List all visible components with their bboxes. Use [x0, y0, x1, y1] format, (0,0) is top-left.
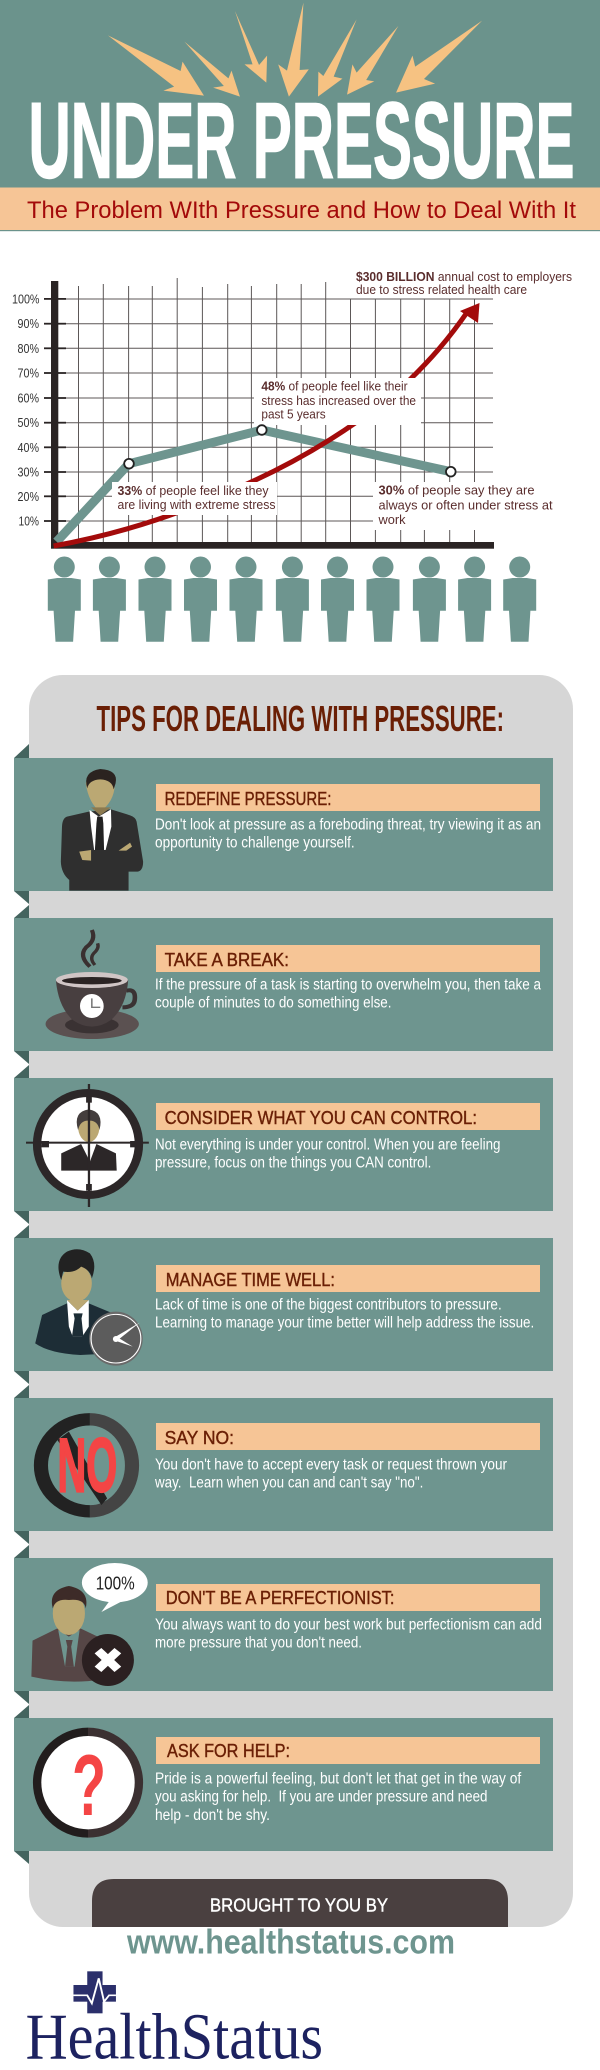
callout: 30 percent: work: [378, 512, 406, 527]
callout: 48 percent: 48% of people feel like their: [261, 379, 408, 394]
icon: question mark: [33, 1728, 143, 1838]
tip text: You always want to do your best work but perfectionism can add: [155, 1616, 542, 1633]
tip text: [155, 1770, 522, 1824]
panel: ask for help: [14, 1718, 553, 1851]
tip text: [155, 816, 541, 851]
panel: redefine pressure: [14, 758, 553, 891]
tip text: couple of minutes to do something else.: [155, 994, 392, 1011]
tip text: Don't look at pressure as a foreboding threat, try viewing it as an: [155, 816, 541, 833]
tip header bar: REDEFINE PRESSURE:: [165, 788, 331, 809]
icon: man with speech bubble: 100%: [96, 1573, 135, 1593]
tip text: help - don't be shy.: [155, 1807, 270, 1824]
y axis labels: 20%: [18, 490, 39, 504]
tip text: [155, 976, 541, 1011]
tip header bar: [156, 784, 540, 811]
y axis labels: [12, 292, 40, 528]
icon: medical cross with pulse: [73, 1971, 116, 2013]
tip header bar: [156, 1265, 540, 1292]
icon: businessman arms crossed: [61, 769, 143, 891]
tip text: [155, 1136, 500, 1171]
panel: tips background: [29, 675, 573, 1927]
callout: 300 billion: [356, 269, 572, 297]
subtitle band: [0, 188, 600, 231]
panel: take a break: [14, 918, 553, 1051]
ribbon folds: [14, 744, 29, 1864]
icon: no sign: [41, 1419, 132, 1511]
callout: 48 percent: past 5 years: [261, 407, 326, 422]
panel: manage time well: [14, 1238, 553, 1371]
icon: businessman with clock: [35, 1249, 143, 1366]
callout: 48 percent: stress has increased over the: [261, 393, 416, 408]
tip text: [155, 1616, 542, 1651]
callout: 30 percent: 30% of people say they are: [378, 482, 534, 497]
y axis labels: 60%: [18, 392, 39, 406]
tip text: opportunity to challenge yourself.: [155, 834, 355, 851]
callout: 33 percent: [118, 483, 276, 512]
icon: man with speech bubble: [31, 1563, 148, 1686]
callout: 33 percent: 33% of people feel like they: [118, 483, 269, 498]
panel: consider what you can control: [14, 1078, 553, 1211]
icon: question mark: ?: [72, 1738, 106, 1834]
tip text: Pride is a powerful feeling, but don't let that get in the way of: [155, 1770, 522, 1787]
callout: 30 percent: [378, 482, 553, 527]
tip header bar: CONSIDER WHAT YOU CAN CONTROL:: [165, 1107, 477, 1128]
tip header bar: SAY NO:: [165, 1427, 234, 1448]
tip header bar: TAKE A BREAK:: [165, 949, 289, 970]
callout: 300 billion: due to stress related health care: [356, 282, 527, 297]
icon: pressure arrows: [108, 3, 482, 97]
tip text: [154, 1456, 507, 1491]
tip text: Not everything is under your control. When you are feeling: [155, 1136, 500, 1153]
tip header bar: [156, 1423, 540, 1450]
tip text: way. Learn when you can and can't say "no".: [154, 1474, 423, 1491]
icon: coffee cup with clock: [46, 930, 139, 1039]
tip text: Learning to manage your time better will help address the issue.: [155, 1314, 534, 1331]
website url: www.healthstatus.com: [126, 1923, 455, 1961]
chart axes: [44, 281, 494, 549]
tip header bar: MANAGE TIME WELL:: [166, 1269, 335, 1290]
y axis labels: 90%: [18, 317, 39, 331]
icon row: people: [48, 556, 536, 642]
panel: don't be a perfectionist: [14, 1558, 553, 1691]
callout: 33 percent: are living with extreme stress: [118, 497, 276, 512]
footer tab: brought to you by: BROUGHT TO YOU BY: [210, 1895, 388, 1916]
icon: no sign: NO: [58, 1424, 117, 1508]
tip text: Lack of time is one of the biggest contributors to pressure.: [155, 1296, 502, 1313]
y axis labels: 70%: [18, 366, 39, 380]
callout: 30 percent: always or often under stress at: [378, 497, 553, 512]
y axis labels: 80%: [18, 342, 39, 356]
tip header bar: [156, 1737, 540, 1764]
tip text: If the pressure of a task is starting to overwhelm you, then take a: [155, 976, 541, 993]
cost arrow: [54, 303, 479, 546]
tip header bar: [156, 1103, 540, 1130]
tip text: You don't have to accept every task or request thrown your: [155, 1456, 507, 1473]
subtitle band: The Problem WIth Pressure and How to Deal With It: [27, 197, 576, 224]
callout backgrounds: [112, 378, 557, 530]
icon: target on businessman: [26, 1084, 149, 1207]
y axis labels: 40%: [18, 441, 39, 455]
callout: 48 percent: [261, 379, 416, 422]
tip text: you asking for help. If you are under pressure and need: [155, 1788, 488, 1805]
stress line: [57, 430, 451, 542]
footer tab: brought to you by: [92, 1879, 508, 1927]
header banner: [0, 0, 600, 200]
logo: HealthStatus: [26, 1971, 323, 2070]
y axis labels: 30%: [18, 466, 39, 480]
y axis labels: 50%: [18, 416, 39, 430]
panel: say no: [14, 1398, 553, 1531]
tip text: pressure, focus on the things you CAN control.: [155, 1154, 431, 1171]
tip header bar: [156, 1584, 540, 1611]
tip header bar: DON'T BE A PERFECTIONIST:: [166, 1587, 394, 1608]
tip header bar: [156, 945, 540, 972]
data points: [124, 425, 456, 477]
tip text: more pressure that you don't need.: [155, 1634, 362, 1651]
y axis labels: 10%: [18, 514, 39, 528]
chart: stress statistics: [12, 269, 572, 549]
tip header bar: ASK FOR HELP:: [167, 1740, 290, 1761]
y axis labels: 100%: [12, 292, 40, 306]
tip text: [155, 1296, 534, 1331]
callout: 300 billion: $300 BILLION annual cost to employers: [356, 269, 572, 284]
